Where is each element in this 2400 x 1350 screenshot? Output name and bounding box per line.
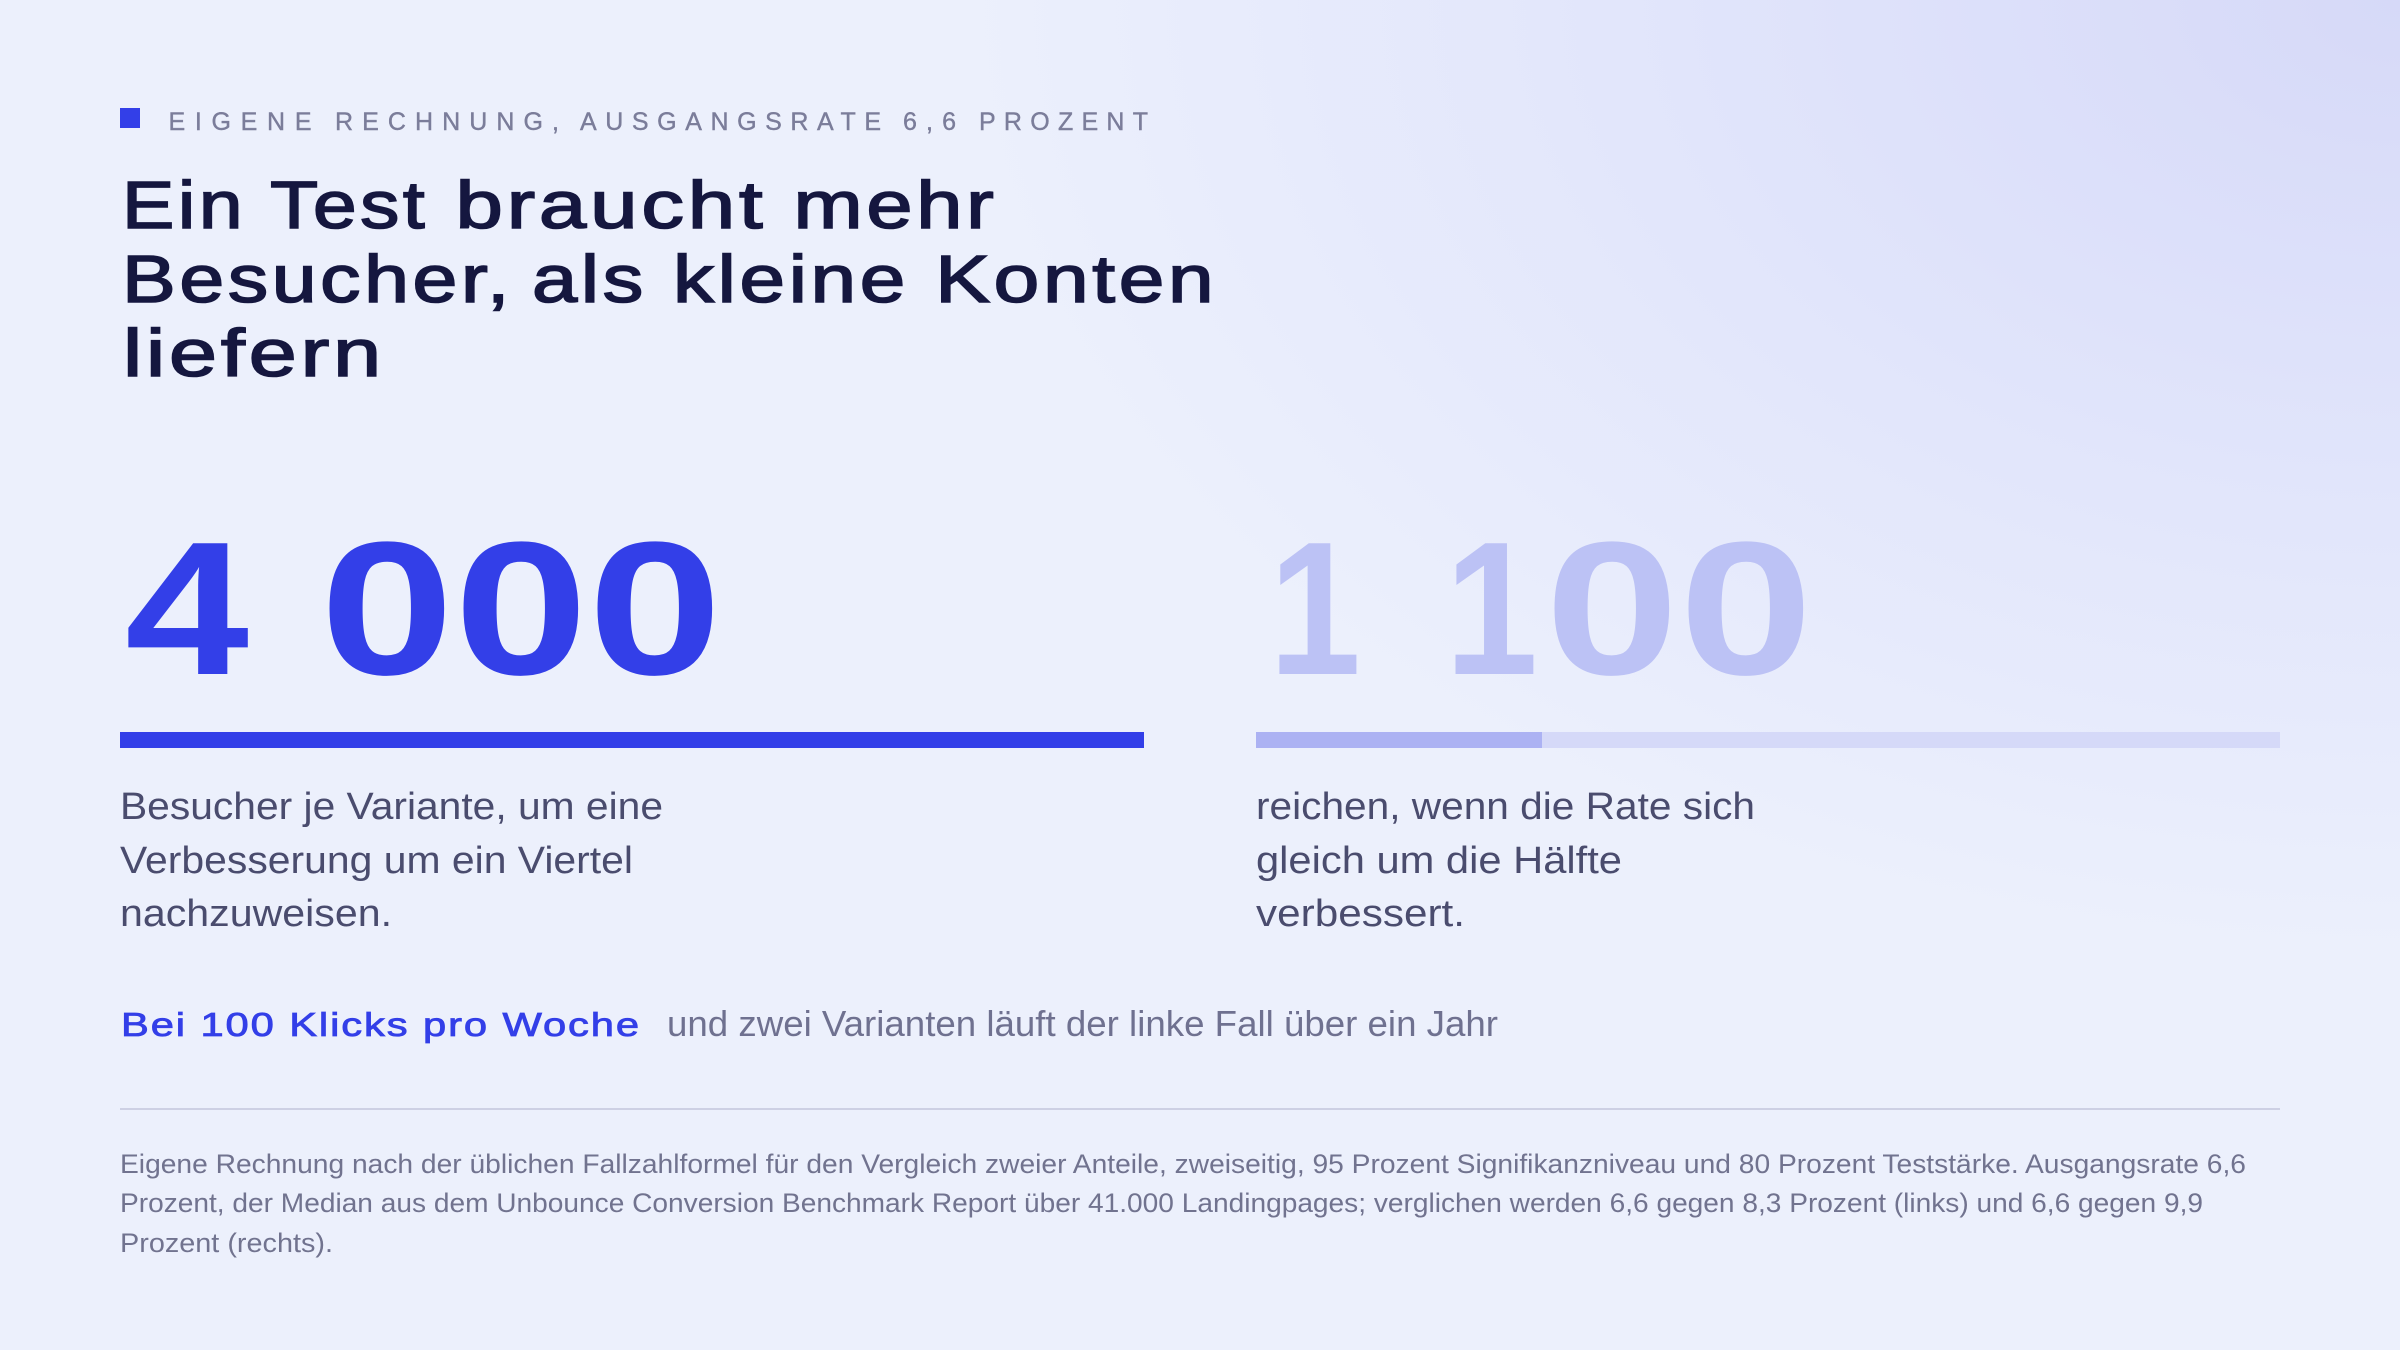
panel: right stat 1 100 xyxy=(1256,503,2280,935)
description right: reichen, wenn die Rate sich xyxy=(1256,786,1755,828)
kicker text: RECHNUNG, xyxy=(335,108,559,136)
kicker text: PROZENT xyxy=(979,108,1148,136)
big number right: 1 xyxy=(1445,503,1538,715)
bar left xyxy=(120,732,1144,748)
title: Besucher, xyxy=(122,242,513,317)
title: Test xyxy=(270,168,428,243)
panel: left stat 4 000 xyxy=(120,503,1144,935)
big number right: 1 xyxy=(1269,503,1361,715)
icon: blue square marker xyxy=(120,108,140,128)
bar right xyxy=(1256,732,2280,748)
big number left xyxy=(125,503,722,715)
callout text: und zwei Varianten läuft der linke Fall über ein Jahr xyxy=(667,1003,1498,1044)
big number right xyxy=(1269,503,1813,715)
footnote: Prozent, der Median aus dem Unbounce Conversion Benchmark Report über 41.000 Landingpages; verglichen werden 6,6 gegen 8,3 Prozent (links) und 6,6 gegen 9,9 xyxy=(120,1188,2203,1218)
title xyxy=(122,168,1217,391)
callout emphasis: Bei 100 Klicks pro Woche xyxy=(121,1006,641,1043)
kicker text: AUSGANGSRATE xyxy=(580,108,881,136)
description left: nachzuweisen. xyxy=(120,893,392,935)
big number left: 4 xyxy=(125,503,249,715)
footnote: Eigene Rechnung nach der üblichen Fallzahlformel für den Vergleich zweier Anteile, zweiseitig, 95 Prozent Signifikanzniveau und 80 Prozent Teststärke. Ausgangsrate 6,6 xyxy=(120,1149,2246,1179)
title: als xyxy=(532,242,647,317)
footnote: Prozent (rechts). xyxy=(120,1228,333,1258)
description left: Verbesserung um ein Viertel xyxy=(120,840,633,882)
description left: Besucher je Variante, um eine xyxy=(120,786,663,828)
kicker text: 6,6 xyxy=(903,108,956,136)
title: Ein xyxy=(122,168,246,243)
title: Konten xyxy=(935,242,1217,317)
big number right: 00 xyxy=(1545,503,1813,715)
description right xyxy=(1256,786,1755,935)
kicker text: EIGENE xyxy=(168,108,312,136)
description right: verbessert. xyxy=(1256,893,1465,935)
title: mehr xyxy=(794,168,998,243)
title: liefern xyxy=(123,316,385,391)
description right: gleich um die Hälfte xyxy=(1256,840,1622,882)
title: braucht xyxy=(456,168,766,243)
big number left: 000 xyxy=(320,503,722,715)
kicker xyxy=(120,108,1148,136)
description left xyxy=(120,786,663,935)
kicker text xyxy=(168,108,1148,136)
title: kleine xyxy=(673,242,909,317)
callout xyxy=(121,1003,1498,1044)
footnote xyxy=(120,1149,2246,1258)
